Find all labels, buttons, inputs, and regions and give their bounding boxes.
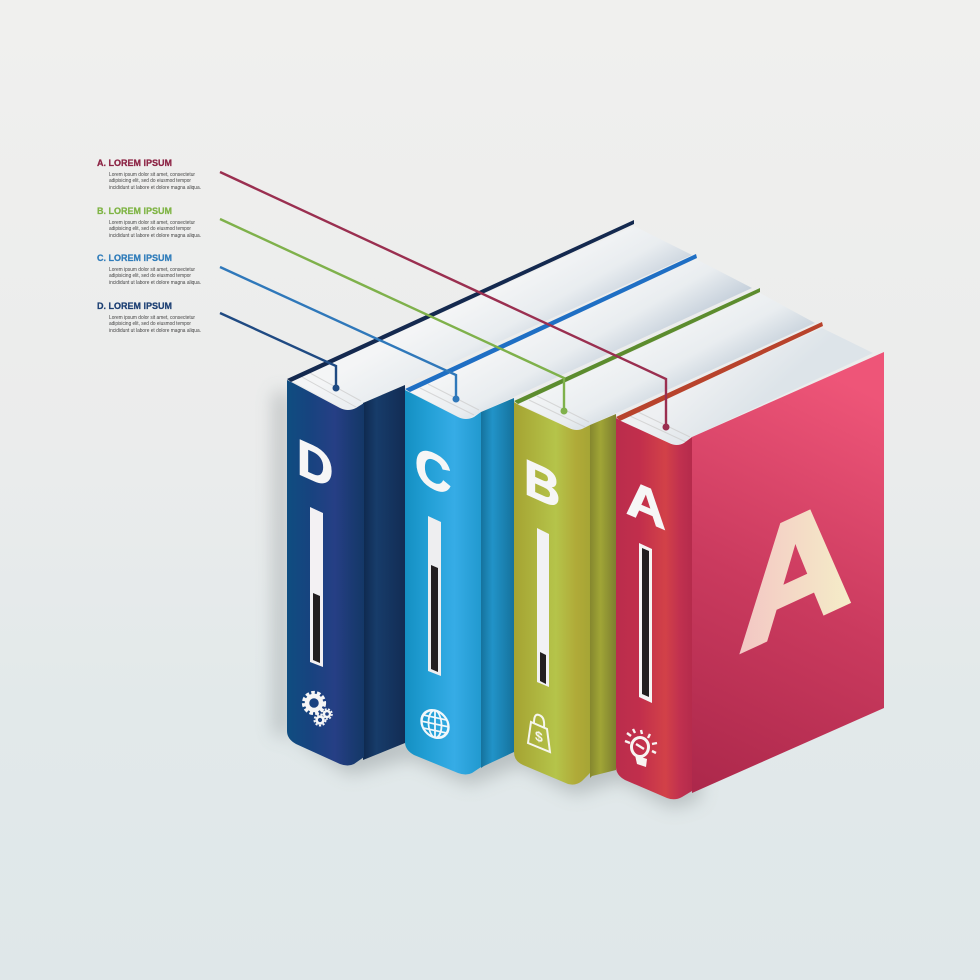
legend item C: adipisicing elit, sed do eiusmod tempor: [109, 273, 191, 279]
book B letter: B: [524, 449, 560, 521]
book B pages: [519, 293, 815, 431]
connector B: [220, 219, 568, 414]
legend item A: [97, 158, 201, 191]
legend item C: [97, 253, 201, 286]
legend item B: [97, 206, 201, 239]
book A cover edge: [616, 322, 823, 421]
book C progress bar: [428, 516, 441, 676]
icon: gears: [304, 692, 332, 726]
book D: [287, 220, 692, 766]
legend item A: Lorem ipsum dolor sit amet, consectetur: [109, 172, 195, 178]
legend: [97, 158, 201, 334]
big cover letter A: A: [739, 458, 852, 685]
book A spine: [616, 418, 692, 799]
legend item C: C. LOREM IPSUM: [97, 253, 172, 263]
connector D: [220, 313, 340, 392]
book A progress bar: [639, 543, 652, 703]
book B cover edge: [514, 288, 760, 404]
icon: globe: [422, 708, 448, 740]
book A front cover: [692, 352, 884, 793]
legend item A: A. LOREM IPSUM: [97, 158, 172, 168]
legend item B: adipisicing elit, sed do eiusmod tempor: [109, 226, 191, 232]
book C: [405, 254, 752, 774]
legend item B: B. LOREM IPSUM: [97, 206, 172, 216]
legend item D: D. LOREM IPSUM: [97, 301, 172, 311]
book B back panel: [590, 414, 616, 778]
legend item C: incididunt ut labore et dolore magna aliqua.: [109, 280, 201, 286]
book D back panel: [363, 385, 405, 760]
book C cover edge: [405, 254, 697, 392]
legend item B: Lorem ipsum dolor sit amet, consectetur: [109, 220, 195, 226]
book A: [616, 322, 884, 799]
legend item C: Lorem ipsum dolor sit amet, consectetur: [109, 267, 195, 273]
icon: shopping bag: $: [535, 728, 543, 747]
book D cover edge: [287, 220, 634, 382]
legend item D: [97, 301, 201, 334]
book C spine: [405, 390, 481, 774]
book A letter: A: [626, 468, 666, 541]
book B: [514, 288, 815, 785]
connector C: [220, 267, 460, 402]
legend item D: incididunt ut labore et dolore magna aliqua.: [109, 328, 201, 334]
book B spine: [514, 402, 590, 785]
book D pages: [292, 226, 692, 411]
legend item D: Lorem ipsum dolor sit amet, consectetur: [109, 315, 195, 321]
book C pages: [410, 259, 752, 420]
legend item A: adipisicing elit, sed do eiusmod tempor: [109, 178, 191, 184]
book D progress bar: [310, 507, 323, 667]
legend item A: incididunt ut labore et dolore magna aliqua.: [109, 185, 201, 191]
book D letter: D: [297, 429, 333, 501]
legend item D: adipisicing elit, sed do eiusmod tempor: [109, 321, 191, 327]
book B progress bar: [537, 528, 549, 687]
legend item B: incididunt ut labore et dolore magna aliqua.: [109, 233, 201, 239]
book A pages: [620, 328, 873, 446]
book C letter: C: [415, 436, 451, 508]
connector A: [220, 172, 670, 430]
book D spine: [287, 380, 364, 766]
icon: shopping bag: [528, 715, 550, 752]
book shadow: [274, 392, 700, 808]
book C back panel: [481, 398, 514, 768]
icon: light bulb: [625, 729, 657, 767]
